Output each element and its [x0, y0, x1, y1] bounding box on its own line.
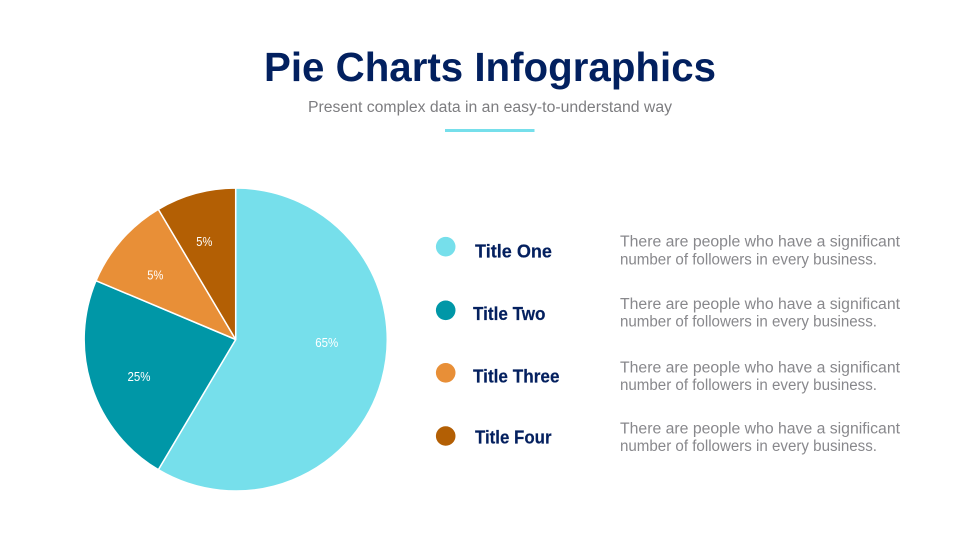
heading: Title Three: Title Three [473, 366, 560, 386]
heading: Title Two: Title Two [473, 303, 546, 324]
description two: number of followers in every business. [620, 314, 877, 331]
pie label: 65%: 65% [315, 336, 338, 350]
description one: number of followers in every business. [620, 251, 877, 268]
title: Pie Charts Infographics [264, 44, 716, 90]
slice: 25% [84, 281, 236, 470]
slice: 5% orange [96, 209, 236, 340]
icon: brown dot [436, 426, 456, 446]
subtitle: Present complex data in an easy-to-understand way [308, 99, 672, 116]
slice: 5% brown [158, 188, 236, 340]
description three: There are people who have a significant [620, 360, 901, 377]
legend row three [436, 360, 901, 394]
pie label: 5% orange: 5% [147, 268, 163, 282]
legend row four [436, 420, 901, 455]
legend row one [436, 234, 901, 268]
heading: Title Four: Title Four [475, 426, 552, 448]
pie label: 5% brown: 5% [196, 235, 212, 249]
accent underline [445, 129, 534, 132]
description three: number of followers in every business. [620, 377, 877, 394]
heading: Title One: Title One [475, 240, 552, 262]
legend row two [436, 296, 901, 331]
pie label: 25%: 25% [128, 370, 150, 384]
slice: 65% [158, 188, 387, 491]
icon: cyan dot [436, 237, 456, 256]
description four: There are people who have a significant [620, 420, 901, 437]
description one: There are people who have a significant [620, 234, 901, 251]
description four: number of followers in every business. [620, 438, 877, 455]
pie chart [84, 188, 387, 491]
description two: There are people who have a significant [620, 296, 901, 313]
icon: teal dot [436, 300, 456, 320]
icon: orange dot [436, 363, 456, 383]
